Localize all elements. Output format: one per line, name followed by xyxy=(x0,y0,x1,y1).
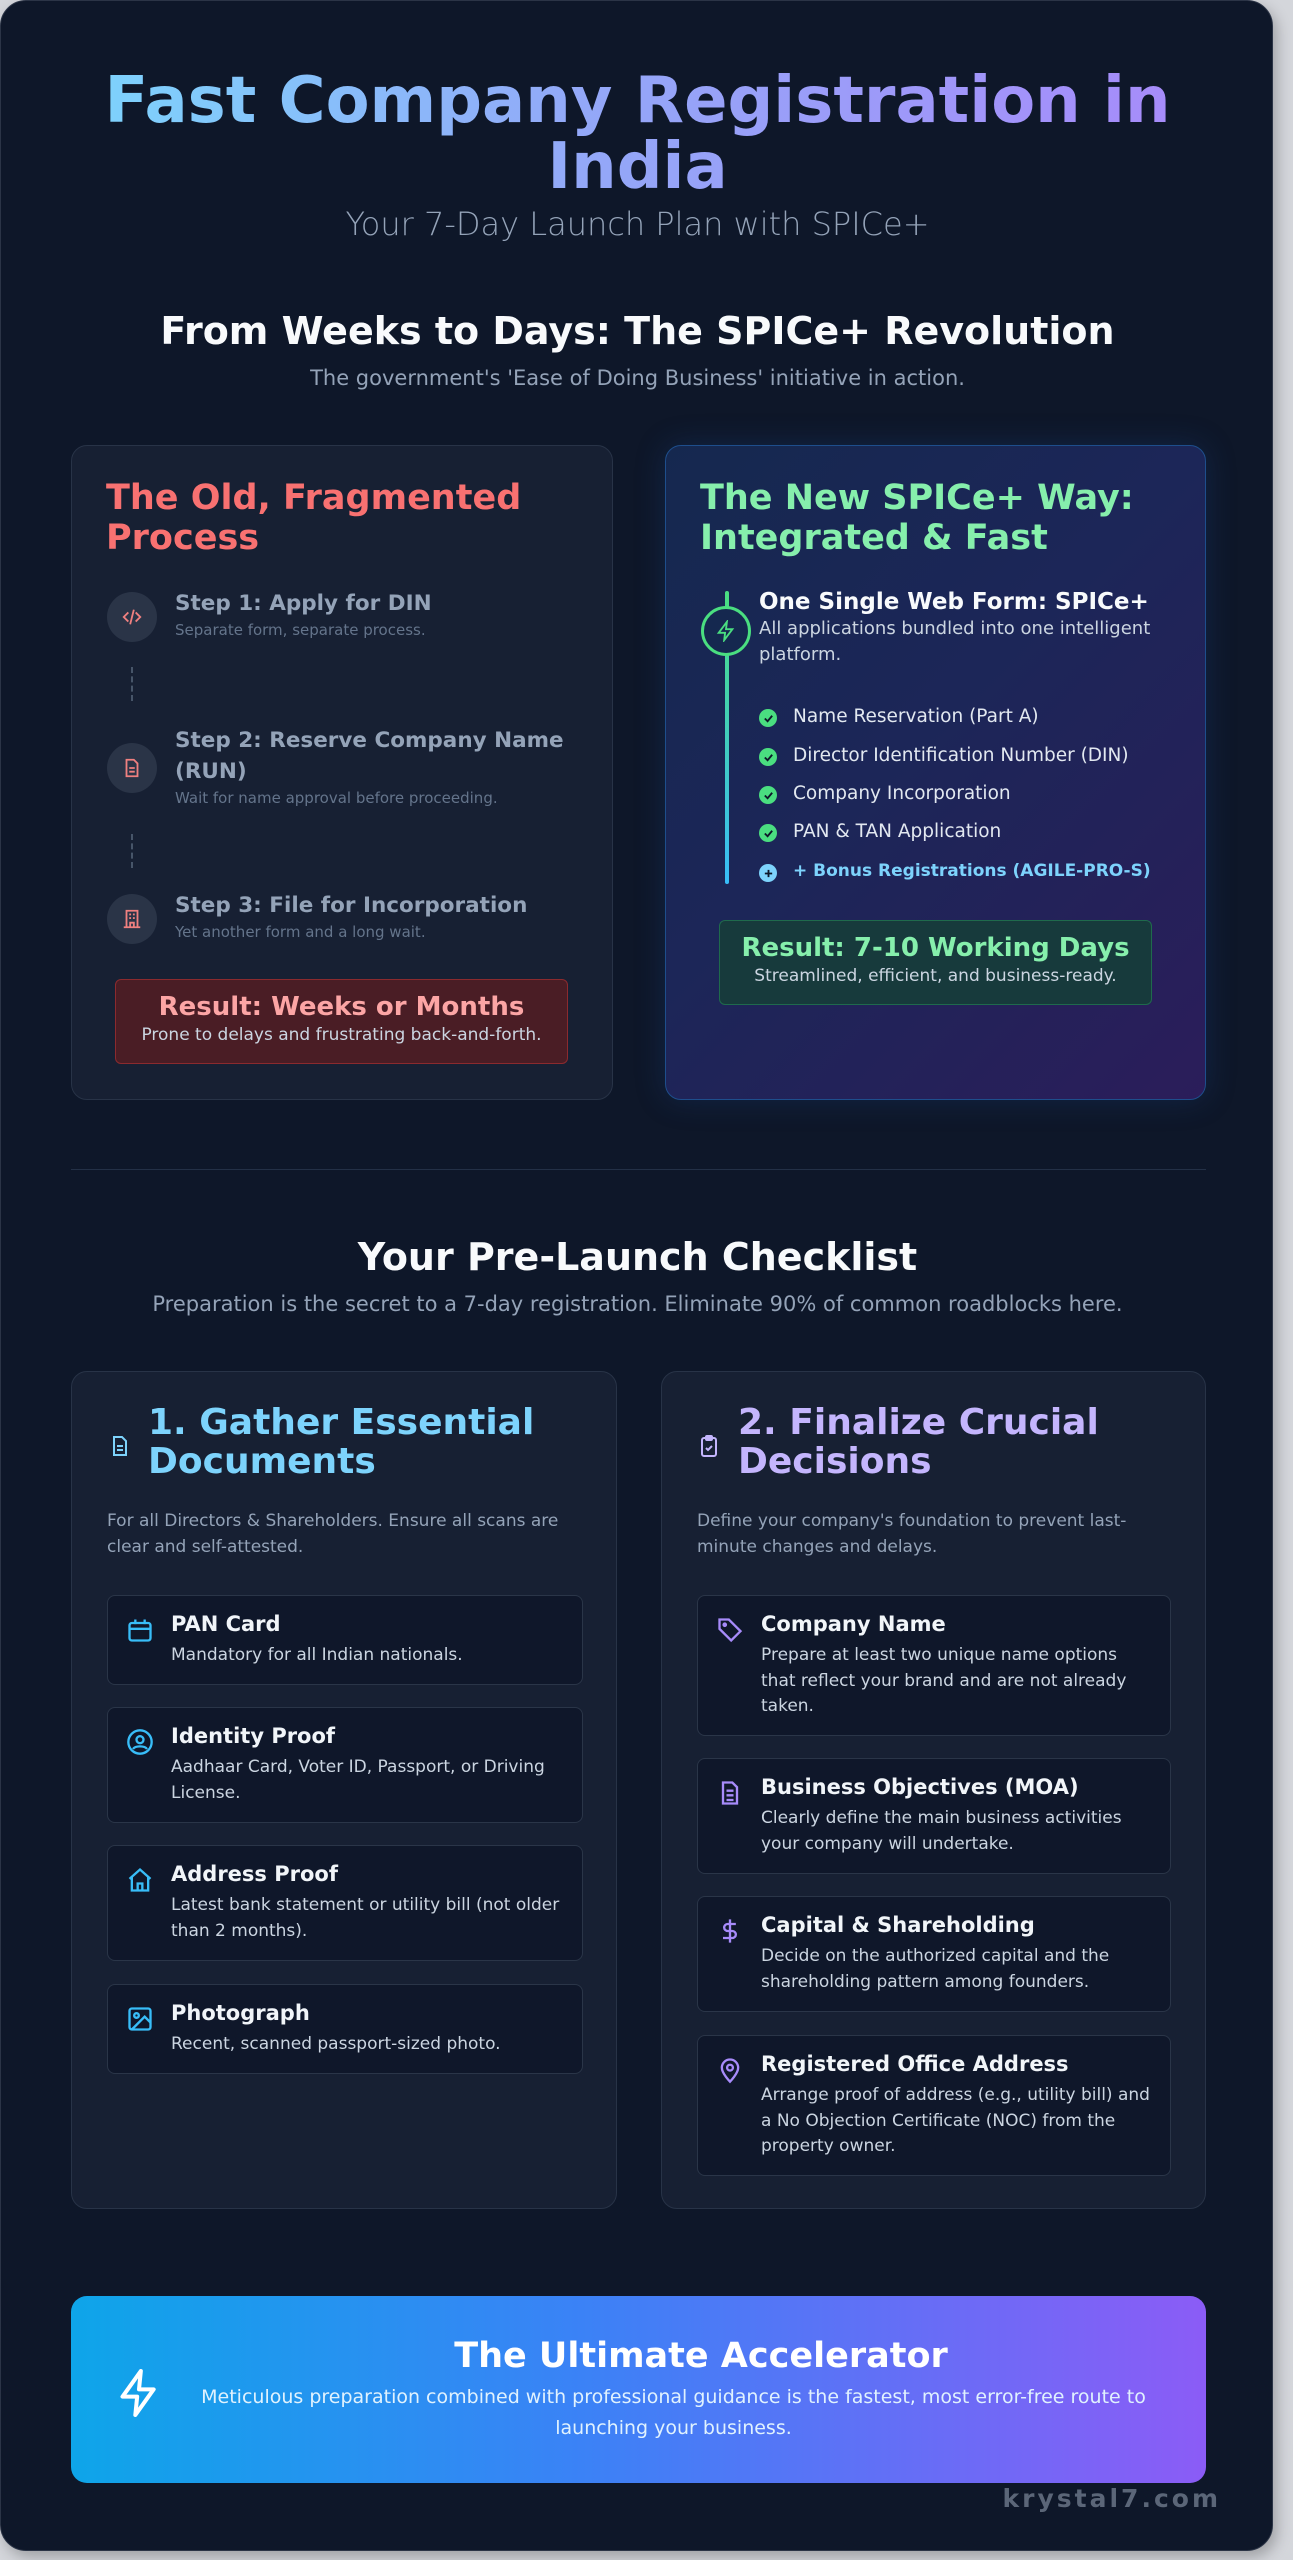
new result xyxy=(719,920,1152,1005)
subheading: The government's 'Ease of Doing Business' initiative in action. xyxy=(310,366,965,390)
banner title: The Ultimate Accelerator xyxy=(454,2336,948,2376)
old result xyxy=(115,979,568,1064)
step 2 xyxy=(107,728,564,807)
panel: new SPICe+ xyxy=(665,445,1206,1100)
step 1: Separate form, separate process. xyxy=(175,621,426,639)
icon: lightning xyxy=(120,2369,156,2417)
panel: documents xyxy=(71,1371,617,2209)
item: identity: Identity Proof xyxy=(171,1724,335,1748)
icon: clipboard xyxy=(701,1435,717,1457)
step 2: Step 2: Reserve Company Name (RUN) xyxy=(175,728,564,784)
decisions heading: 2. Finalize Crucial xyxy=(738,1402,1099,1443)
old title: Process xyxy=(106,518,259,558)
item: office: Arrange proof of address (e.g., utility bill) and a No Objection Certificate (NOC) from the property owner. xyxy=(761,2085,1150,2156)
bonus xyxy=(759,861,1151,882)
item: company name xyxy=(697,1595,1171,1736)
step 3: Step 3: File for Incorporation xyxy=(175,893,527,918)
banner: ultimate accelerator xyxy=(71,2296,1206,2483)
single web form text: One Single Web Form: SPICe+ xyxy=(759,589,1149,615)
item: address xyxy=(107,1845,583,1961)
new result: Streamlined, efficient, and business-ready. xyxy=(754,966,1117,986)
step 2: Wait for name approval before proceeding. xyxy=(175,789,498,807)
title: Fast Company Registration in India xyxy=(104,64,1171,204)
item: office xyxy=(697,2035,1171,2176)
checklist items xyxy=(759,706,1039,727)
text: Director Identification Number (DIN) xyxy=(793,745,1129,766)
panel: decisions xyxy=(661,1371,1206,2209)
item: MOA: Business Objectives (MOA) xyxy=(761,1775,1079,1799)
item: photo: Recent, scanned passport-sized photo. xyxy=(171,2034,501,2054)
old result: Prone to delays and frustrating back-and-forth. xyxy=(141,1025,542,1045)
checklist subheading: Preparation is the secret to a 7-day registration. Eliminate 90% of common roadblocks here. xyxy=(152,1292,1123,1316)
heading: checklist: Your Pre-Launch Checklist xyxy=(358,1235,917,1279)
item: identity xyxy=(107,1707,583,1823)
old title: The Old, Fragmented xyxy=(106,478,521,518)
decisions heading xyxy=(738,1402,1099,1482)
docs heading xyxy=(148,1402,534,1482)
banner text: Meticulous preparation combined with professional guidance is the fastest, most error-free route to launching your business. xyxy=(201,2386,1146,2439)
text: PAN & TAN Application xyxy=(793,821,1001,842)
subtitle: Your 7-Day Launch Plan with SPICe+ xyxy=(346,205,930,243)
watermark: krystal7.com xyxy=(1003,2484,1221,2513)
new title: Integrated & Fast xyxy=(700,518,1048,558)
new result: Result: 7-10 Working Days xyxy=(741,933,1130,963)
step 3: Yet another form and a long wait. xyxy=(175,923,426,941)
item: photo xyxy=(107,1984,583,2074)
item: PAN: PAN Card xyxy=(171,1612,281,1636)
item: photo: Photograph xyxy=(171,2001,310,2025)
step 1 xyxy=(107,591,432,642)
icon: lightning circle xyxy=(701,606,751,656)
old title xyxy=(106,478,521,558)
item: company name: Company Name xyxy=(761,1612,946,1636)
timeline line xyxy=(725,591,729,884)
item: PAN: Mandatory for all Indian nationals. xyxy=(171,1645,463,1665)
docs heading: 1. Gather Essential xyxy=(148,1402,534,1443)
item: identity: Aadhaar Card, Voter ID, Passport, or Driving License. xyxy=(171,1757,545,1802)
text: Company Incorporation xyxy=(793,783,1011,804)
step 3 xyxy=(107,893,527,944)
docs desc: For all Directors & Shareholders. Ensure all scans are clear and self-attested. xyxy=(107,1511,558,1556)
panel: old process xyxy=(71,445,613,1100)
item: office: Registered Office Address xyxy=(761,2052,1069,2076)
text: Name Reservation (Part A) xyxy=(793,706,1039,727)
text: + Bonus Registrations (AGILE-PRO-S) xyxy=(793,861,1151,881)
decisions heading: Decisions xyxy=(738,1441,932,1482)
step 1: Step 1: Apply for DIN xyxy=(175,591,432,616)
decisions desc: Define your company's foundation to prevent last-minute changes and delays. xyxy=(697,1511,1126,1556)
docs heading: Documents xyxy=(148,1441,376,1482)
item: PAN xyxy=(107,1595,583,1685)
item: company name: Prepare at least two unique name options that reflect your brand and are not already taken. xyxy=(761,1645,1126,1716)
heading: weeks to days: From Weeks to Days: The SPICe+ Revolution xyxy=(160,309,1115,353)
item: address: Address Proof xyxy=(171,1862,338,1886)
single web form text xyxy=(759,589,1150,665)
item: capital: Decide on the authorized capital and the shareholding pattern among founders. xyxy=(761,1946,1109,1992)
icon: doc xyxy=(113,1436,127,1456)
single web form text: All applications bundled into one intelligent platform. xyxy=(759,618,1150,665)
new title: The New SPICe+ Way: xyxy=(700,478,1134,518)
item: address: Latest bank statement or utility bill (not older than 2 months). xyxy=(171,1895,559,1940)
old result: Result: Weeks or Months xyxy=(159,992,524,1022)
item: capital xyxy=(697,1896,1171,2012)
new title xyxy=(700,478,1134,558)
item: MOA xyxy=(697,1758,1171,1874)
item: capital: Capital & Shareholding xyxy=(761,1913,1035,1937)
item: MOA: Clearly define the main business activities your company will undertake. xyxy=(761,1808,1122,1854)
